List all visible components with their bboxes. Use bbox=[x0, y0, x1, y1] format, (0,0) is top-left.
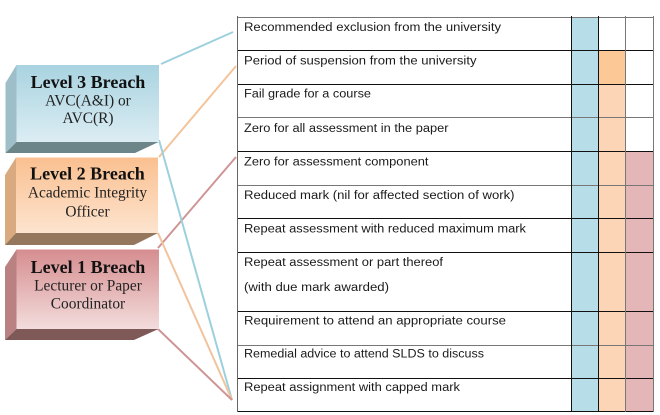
table column shading bbox=[572, 17, 653, 412]
box: Level 1 Breach: Lecturer or Paper bbox=[34, 278, 142, 294]
box: Level 3 Breach: AVC(A&I) or bbox=[45, 92, 131, 110]
box: Level 2 Breach bbox=[5, 158, 158, 245]
sanctions list: (with due mark awarded) bbox=[244, 282, 389, 294]
table grid bbox=[237, 16, 654, 412]
box: Level 3 Breach: Level 3 Breach bbox=[31, 72, 145, 92]
connector lines bbox=[158, 32, 236, 400]
sanctions list bbox=[244, 22, 526, 394]
box: Level 3 Breach: AVC(R) bbox=[62, 110, 114, 127]
sanctions list: Repeat assignment with capped mark bbox=[244, 382, 460, 394]
sanctions list: Fail grade for a course bbox=[244, 88, 371, 100]
box: Level 2 Breach: Officer bbox=[65, 204, 110, 220]
sanctions list: Reduced mark (nil for affected section of work) bbox=[244, 190, 515, 202]
box: Level 1 Breach bbox=[5, 250, 159, 340]
sanctions list: Zero for assessment component bbox=[244, 156, 429, 168]
box: Level 1 Breach: Coordinator bbox=[51, 296, 125, 312]
sanctions list: Requirement to attend an appropriate course bbox=[244, 316, 506, 328]
box: Level 2 Breach: Level 2 Breach bbox=[30, 164, 145, 184]
box: Level 2 Breach: Academic Integrity bbox=[28, 184, 147, 202]
box: Level 3 Breach bbox=[6, 65, 159, 153]
sanctions list: Zero for all assessment in the paper bbox=[244, 123, 449, 135]
sanctions list: Recommended exclusion from the university bbox=[244, 22, 501, 34]
sanctions list: Remedial advice to attend SLDS to discuss bbox=[244, 348, 484, 360]
sanctions list: Repeat assessment or part thereof bbox=[244, 257, 444, 269]
box: Level 1 Breach: Level 1 Breach bbox=[31, 257, 145, 277]
sanctions list: Repeat assessment with reduced maximum mark bbox=[244, 224, 526, 236]
sanctions list: Period of suspension from the university bbox=[244, 56, 477, 68]
